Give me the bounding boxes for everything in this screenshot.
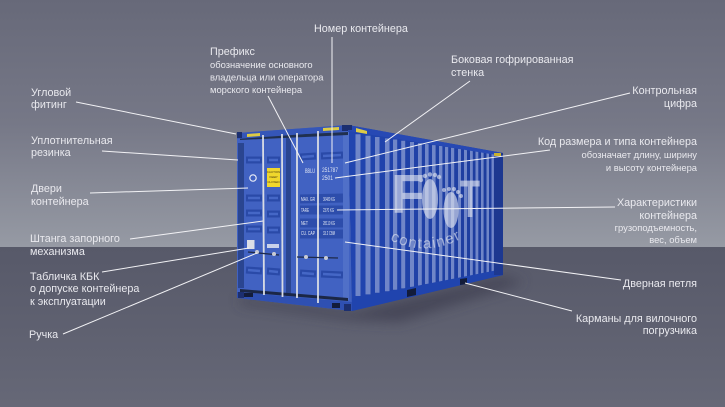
door markings: BBLU [305,168,315,175]
callout: gasket: резинка [31,147,71,159]
callout: CSC plate: Табличка КБК [30,271,100,283]
watermark logo: T [460,170,480,229]
callout: container doors: Двери [31,183,62,195]
warning sticker [267,168,280,187]
callout: characteristics: вес, объем [649,234,697,245]
callout: container doors: контейнера [31,196,89,208]
callout: characteristics [337,197,697,245]
callout: prefix [210,46,324,163]
door markings: 30480 KG [323,197,335,203]
callout: prefix: Префикс [210,46,256,58]
warning sticker: CAUTION [267,170,280,174]
callout: forklift pockets: Карманы для вилочного [576,313,697,325]
callout: door hinge [345,242,697,290]
door markings: 2370 KG [323,208,334,214]
container shadow [240,276,525,322]
callout: prefix: морского контейнера [210,84,303,95]
door markings: NET [301,221,308,227]
top rail [240,132,348,140]
callout: size and type code: и высоту контейнера [606,162,698,173]
callout: prefix: обозначение основного [210,59,313,70]
callout: size and type code: обозначает длину, ширину [582,149,697,160]
callout: corner fitting [31,87,236,134]
corner markings [247,133,260,137]
callout: forklift pockets: погрузчика [643,325,697,337]
callout: corner fitting: Угловой [31,87,71,99]
watermark logo: container [392,232,458,248]
watermark logo: F [391,163,425,225]
callout: door hinge: Дверная петля [623,278,697,290]
callout: corner fitting: фитинг [31,99,67,111]
callout: handle [29,253,257,341]
callout: size and type code [335,136,698,178]
callout: CSC plate: о допуске контейнера [30,283,139,295]
callout: characteristics: Характеристики [617,197,697,209]
callout: CSC plate [30,248,249,308]
door markings: 2501 [322,175,333,182]
callout: prefix: владельца или оператора [210,72,324,82]
door seam [286,137,291,296]
door markings: 251787 [322,167,338,174]
small plate [267,244,279,248]
side corrugated wall [348,125,503,311]
callout: forklift pockets [465,283,697,337]
corner fittings [237,125,352,311]
door edge gasket [238,143,244,288]
door markings [301,167,338,237]
callout: gasket: Уплотнительная [31,135,113,147]
locking bars [263,131,318,303]
door markings: MAX. GR [301,197,315,203]
callout: container number [314,23,408,163]
callout: locking rod: механизма [30,246,85,258]
door markings: 33.2 CBM [323,231,335,237]
callout: locking rod [30,221,263,258]
callout: check digit: цифра [664,98,697,110]
door markings: TARE [301,208,309,214]
background floor [0,247,725,407]
callout: corrugated side wall [385,54,574,142]
callout: locking rod: Штанга запорного [30,233,120,245]
callout: characteristics: грузоподъемность, [615,222,697,233]
callout: size and type code: Код размера и типа контейнера [538,136,697,148]
warning sticker: KEEP [269,175,278,179]
shipping container [237,125,503,311]
callout: CSC plate: к эксплуатации [30,296,106,308]
background wall [0,0,725,247]
CSC plate [247,240,254,249]
callout: container number: Номер контейнера [314,23,408,35]
callout: corrugated side wall: стенка [451,67,484,79]
door face [237,125,501,311]
door markings: CU. CAP [301,231,315,237]
callout: corrugated side wall: Боковая гофрированная [451,54,574,66]
door emblem [250,175,256,181]
callout: handle: Ручка [29,329,58,341]
warning sticker: CLOSED [267,180,280,184]
callout: check digit [345,85,697,163]
door handles [248,252,338,258]
callout: check digit: Контрольная [632,85,697,97]
bottom openings [244,293,340,308]
callout: container doors [31,183,248,208]
door markings: 28110 KG [323,221,335,227]
door corrugation [246,155,343,275]
watermark logo [391,163,480,248]
fork pockets [407,288,416,297]
callout: gasket [31,135,238,160]
bottom rail [240,289,348,301]
callout: characteristics: контейнера [639,210,697,222]
